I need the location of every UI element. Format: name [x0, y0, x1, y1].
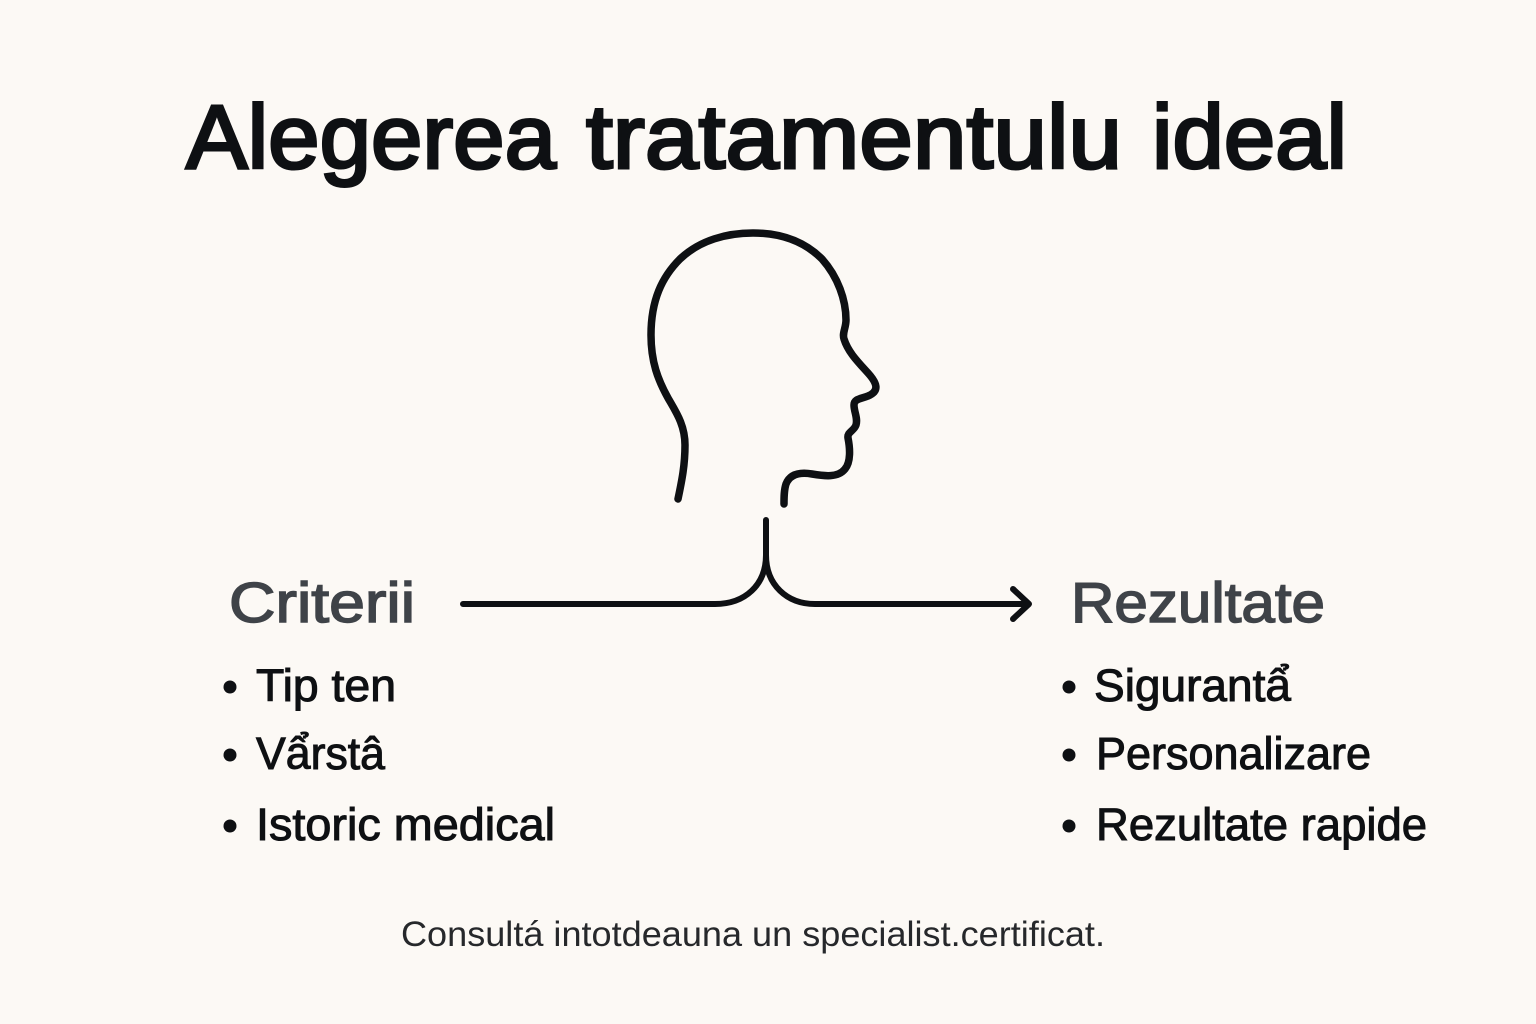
list: criterii — [224, 660, 555, 850]
list item: siguranta: Sigurantẩ — [1094, 660, 1292, 711]
list item: rezultate rapide: Rezultate rapide — [1096, 799, 1427, 850]
list item: istoric medical: Istoric medical — [256, 799, 555, 850]
footer note: Consultá intotdeauna un specialist.certificat. — [401, 915, 1105, 954]
title: tratamentulu — [586, 88, 1122, 188]
heading: criterii: Criterii — [229, 571, 415, 635]
icon: head profile — [651, 233, 876, 504]
list: rezultate — [1062, 660, 1427, 850]
title: ideal — [1152, 88, 1347, 188]
heading: rezultate: Rezultate — [1071, 571, 1325, 635]
list item: varsta: Vẩrstâ — [256, 728, 386, 779]
arrow: criteria to results — [463, 520, 1029, 619]
title: Alegerea — [186, 88, 557, 188]
list item: personalizare: Personalizare — [1096, 728, 1371, 779]
list item: tip ten: Tip ten — [256, 660, 396, 711]
